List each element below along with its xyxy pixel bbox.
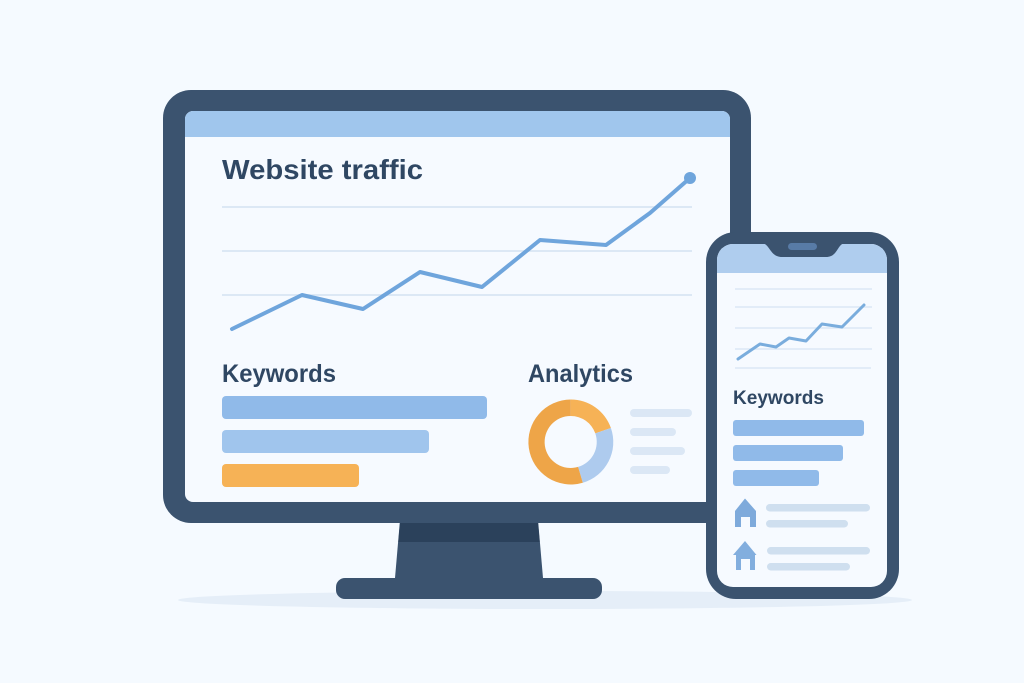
phone heading: keywords: Keywords xyxy=(733,387,824,409)
heading: analytics: Analytics xyxy=(528,360,633,388)
list lines 1 xyxy=(766,504,870,528)
heading: keywords: Keywords xyxy=(222,360,336,388)
list lines 2 xyxy=(767,547,870,570)
heading: website traffic: Website traffic xyxy=(222,154,423,185)
ground shadow xyxy=(178,591,912,609)
line chart: website traffic xyxy=(222,172,696,329)
monitor stand xyxy=(336,520,602,599)
phone body xyxy=(706,232,899,599)
phone screen xyxy=(717,244,887,587)
keyword bars xyxy=(222,396,487,487)
analytics legend lines xyxy=(630,409,692,474)
monitor frame xyxy=(163,90,751,523)
phone notch xyxy=(762,243,845,257)
browser header bar xyxy=(185,111,730,137)
smartphone xyxy=(706,232,899,599)
phone header xyxy=(717,244,887,273)
icon: house 2 xyxy=(733,541,756,570)
donut chart xyxy=(528,400,613,484)
monitor screen xyxy=(185,111,730,502)
phone line chart xyxy=(735,289,872,368)
phone speaker xyxy=(788,243,817,250)
icon: house 1 xyxy=(735,498,756,527)
phone keyword bars xyxy=(733,420,864,486)
desktop monitor xyxy=(163,90,751,599)
